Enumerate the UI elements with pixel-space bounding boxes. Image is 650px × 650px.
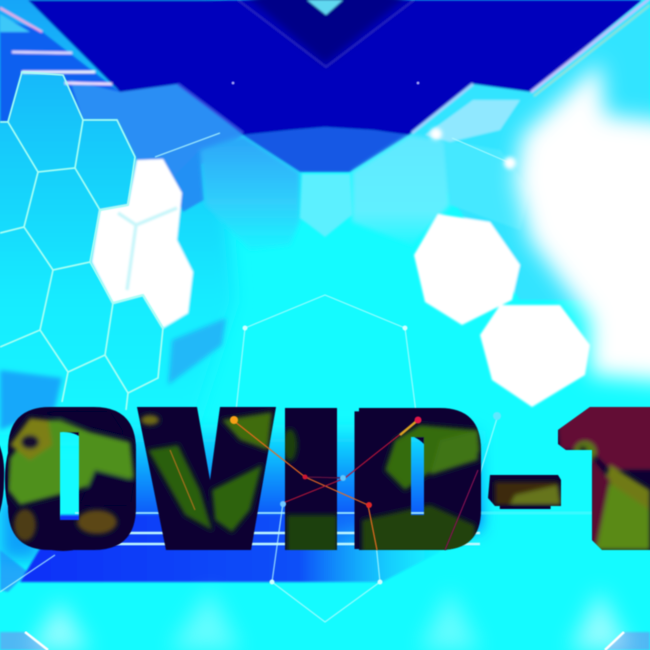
hexagon wireframe left <box>0 72 163 410</box>
letter bodies <box>0 400 650 560</box>
top left corner wedge <box>0 14 30 32</box>
network lines <box>0 133 510 622</box>
camouflage texture <box>8 400 650 553</box>
lower corners <box>0 632 48 650</box>
network lines over title <box>170 420 478 550</box>
title text: V <box>140 368 271 591</box>
faint facets in left cluster <box>118 208 177 290</box>
white cluster left <box>92 159 193 328</box>
title text <box>0 368 650 592</box>
glowing nodes <box>430 128 516 169</box>
white hexes right <box>414 214 520 325</box>
white glow right <box>515 62 650 385</box>
horizontal light lines <box>75 513 650 544</box>
upper right panel <box>409 0 650 300</box>
panel: right hex <box>352 135 450 245</box>
lower white light streaks <box>30 590 630 650</box>
light reflection right <box>425 100 520 142</box>
top edge stripes right <box>412 0 650 133</box>
glow behind title <box>0 430 480 560</box>
panel: central hex row <box>200 135 300 250</box>
title text: O <box>0 369 129 592</box>
blue band under title <box>20 515 450 582</box>
title text: - <box>492 369 559 592</box>
dark top vignette <box>240 0 415 64</box>
lower blue left side <box>0 370 62 430</box>
title text: D <box>343 368 467 592</box>
title text: I <box>270 368 348 592</box>
light beams in the lower corners <box>25 632 624 650</box>
blue shadow below cluster <box>168 318 226 385</box>
inner bevel of the O <box>60 432 70 520</box>
lower corner blue left <box>0 550 28 592</box>
upper left corner panel <box>0 18 140 150</box>
panel: central blue arc <box>243 127 409 172</box>
left wash <box>0 0 235 440</box>
dark top field <box>28 0 642 135</box>
top edge stripes left <box>0 8 243 133</box>
upper diamond outline <box>238 0 414 67</box>
upper left lighter panel <box>70 80 243 180</box>
panel: dark sliver near left white cluster <box>170 150 204 212</box>
top diamond <box>307 0 343 15</box>
panel: far right hex <box>445 140 530 230</box>
network nodes <box>230 82 501 584</box>
panel: central small hex <box>300 174 352 237</box>
title: COVID-19 <box>0 406 650 552</box>
